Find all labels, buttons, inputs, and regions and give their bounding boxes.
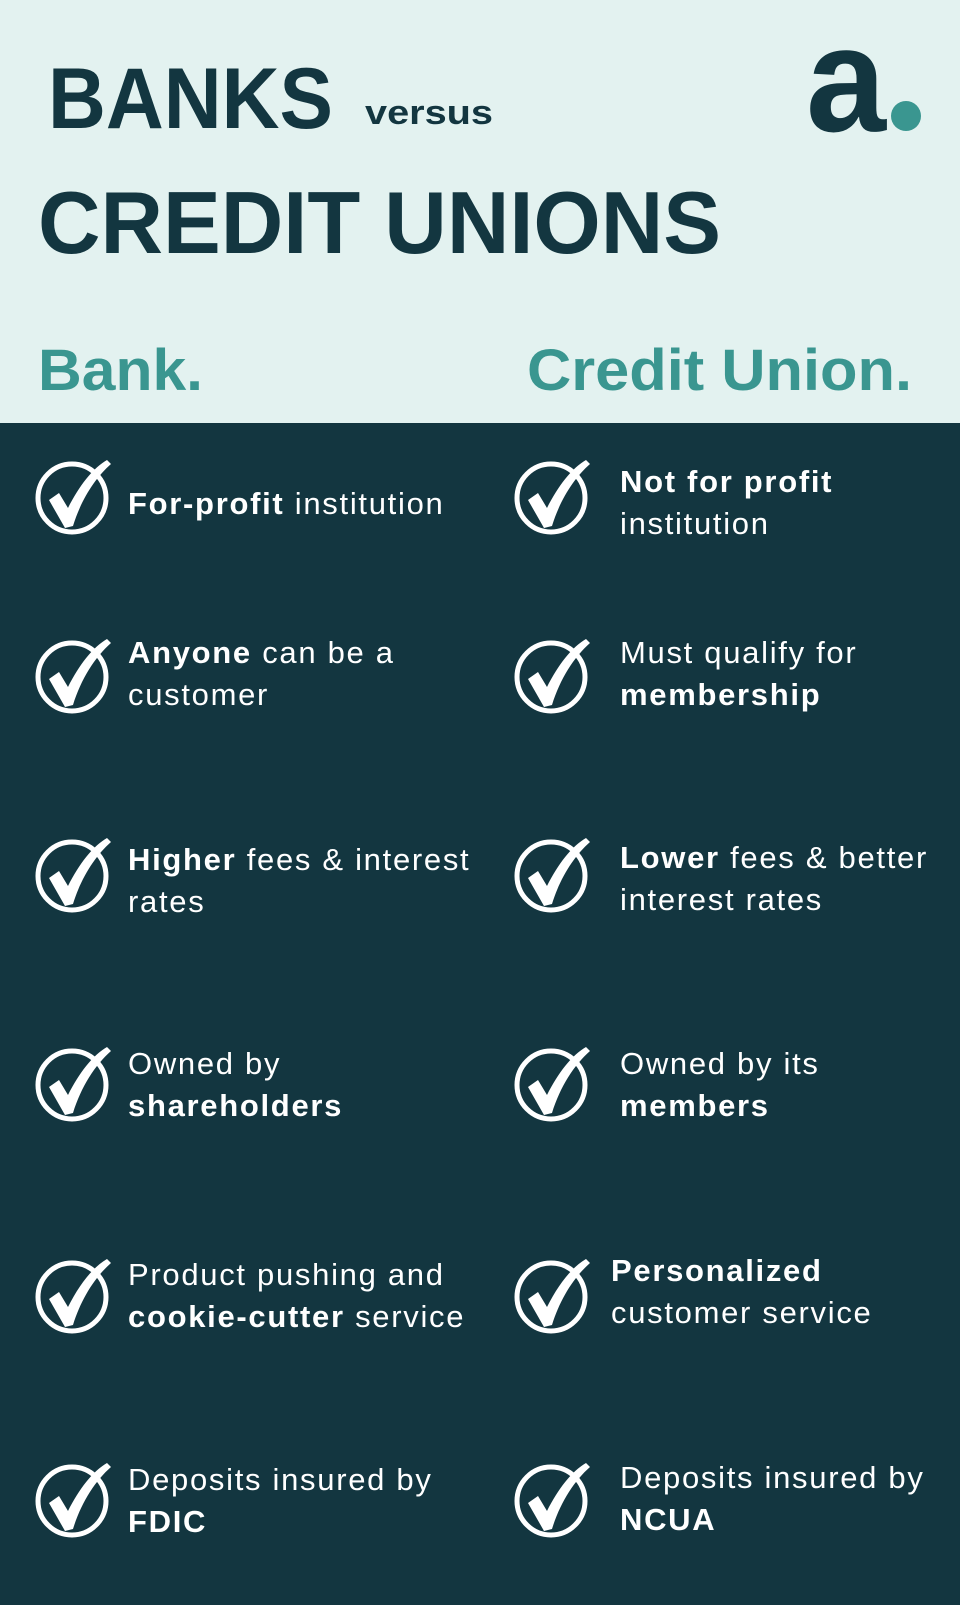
panel: comparison: membership bbox=[620, 677, 821, 712]
panel: comparison: rates bbox=[128, 884, 205, 919]
panel: comparison: Lower fees & better bbox=[620, 840, 928, 875]
title: Credit Union. bbox=[527, 338, 912, 403]
header background bbox=[0, 0, 960, 423]
row 2 bbox=[36, 635, 857, 714]
panel: comparison: Product pushing and bbox=[128, 1257, 445, 1292]
title: Bank. bbox=[38, 338, 203, 403]
title bbox=[38, 0, 921, 403]
panel: comparison: NCUA bbox=[620, 1502, 716, 1537]
panel: comparison: Personalized bbox=[611, 1253, 823, 1288]
panel: comparison: customer service bbox=[611, 1295, 872, 1330]
title: CREDIT UNIONS bbox=[38, 173, 721, 272]
panel: comparison: Anyone can be a bbox=[128, 635, 395, 670]
panel: comparison: For-profit institution bbox=[128, 486, 444, 521]
title: a bbox=[806, 0, 887, 163]
panel: comparison: customer bbox=[128, 677, 269, 712]
row 6 bbox=[36, 1460, 925, 1539]
panel: comparison bbox=[0, 423, 960, 1605]
panel: comparison: Owned by its bbox=[620, 1046, 820, 1081]
row 5 bbox=[36, 1253, 872, 1334]
panel: comparison: institution bbox=[620, 506, 770, 541]
title: versus bbox=[365, 94, 493, 132]
panel: comparison: Deposits insured by bbox=[128, 1462, 433, 1497]
row 3 bbox=[36, 838, 928, 919]
panel: comparison: shareholders bbox=[128, 1088, 343, 1123]
row 1 bbox=[36, 460, 833, 541]
panel: comparison: cookie-cutter service bbox=[128, 1299, 465, 1334]
title: BANKS bbox=[48, 51, 333, 147]
panel: comparison: members bbox=[620, 1088, 770, 1123]
panel: comparison: Must qualify for bbox=[620, 635, 857, 670]
panel: comparison: interest rates bbox=[620, 882, 823, 917]
panel: comparison: Owned by bbox=[128, 1046, 281, 1081]
row 4 bbox=[36, 1046, 820, 1123]
panel: comparison: FDIC bbox=[128, 1504, 207, 1539]
panel: comparison: Deposits insured by bbox=[620, 1460, 925, 1495]
panel: comparison: Higher fees & interest bbox=[128, 842, 470, 877]
panel: comparison: Not for profit bbox=[620, 464, 833, 499]
